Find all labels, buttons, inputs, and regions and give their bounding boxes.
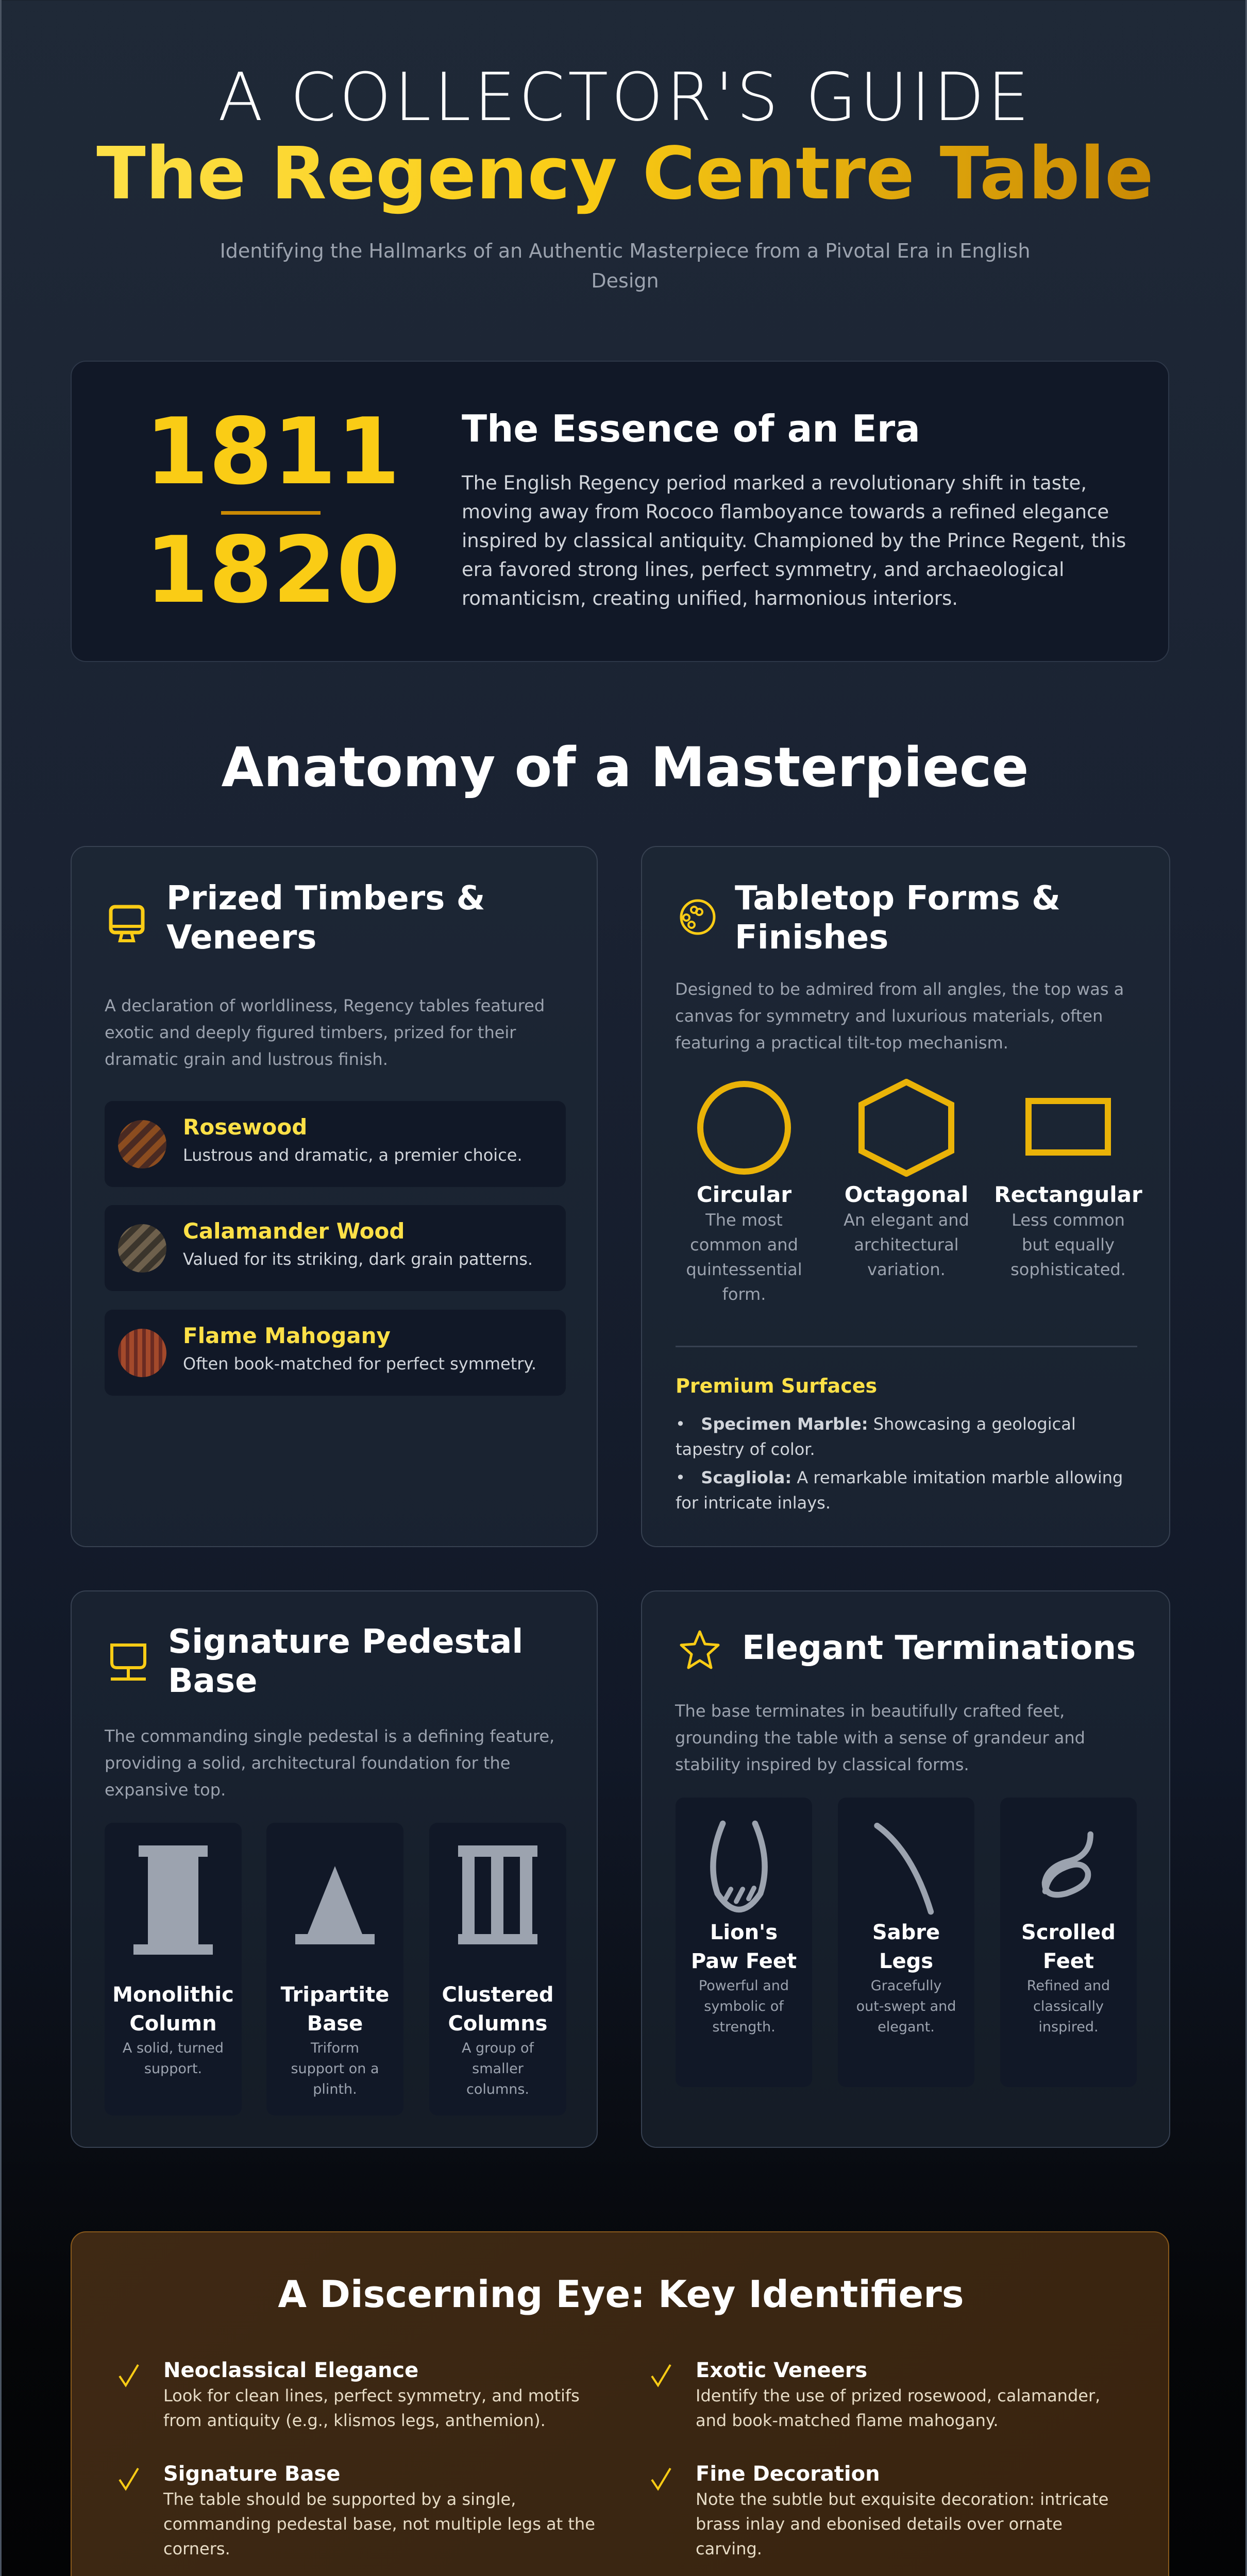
body text: The English Regency period marked a revolutionary shift in taste, moving away from Rococo flamboyance towards a refined elegance inspired by classical antiquity. Championed by the Prince Regent, this era favored strong lines, perfect symmetry, and archaeological romanticism, creating unified, harmonious interiors.: [462, 472, 1126, 609]
sub: sabre legs: Sabre Legs: [872, 1921, 940, 1973]
item: calamander: [105, 1205, 566, 1291]
premium surfaces: • Scagliola: A remarkable imitation marble allowing for intricate inlays.: [676, 1468, 1123, 1513]
panel: tabletop forms: [641, 846, 1170, 1547]
sub: clustered: A group of smaller columns.: [462, 2040, 534, 2097]
shape: rectangular: Rectangular: [994, 1182, 1142, 1207]
panel: essence of an era: [71, 361, 1169, 662]
identifier: neoclassical: Look for clean lines, perfect symmetry, and motifs from antiquity (e.g., klismos legs, anthemion).: [163, 2386, 580, 2430]
item: rosewood: [105, 1101, 566, 1187]
subtitle: Identifying the Hallmarks of an Authentic Masterpiece from a Pivotal Era in English Design: [220, 240, 1030, 292]
heading: A Discerning Eye: Key Identifiers: [278, 2273, 964, 2316]
identifier: signature base: Signature Base: [163, 2462, 340, 2486]
panel: essence of an era: 1820: [145, 517, 400, 623]
item: rosewood: Rosewood: [183, 1114, 307, 1140]
description: The base terminates in beautifully crafted feet, grounding the table with a sense of grandeur and stability inspired by classical forms.: [675, 1701, 1085, 1774]
item: flame mahogany: [105, 1310, 566, 1396]
item: flame mahogany: Flame Mahogany: [183, 1323, 391, 1348]
shape: rectangular: Less common but equally sophisticated.: [1010, 1210, 1126, 1279]
premium surfaces: Premium Surfaces: [676, 1375, 877, 1397]
panel: prized timbers: [71, 846, 598, 1547]
sub: monolithic: [105, 1823, 242, 2115]
identifier: neoclassical: Neoclassical Elegance: [163, 2359, 418, 2382]
icon: pedestal: [110, 1643, 146, 1681]
sub: lion's paw: Powerful and symbolic of strength.: [699, 1978, 789, 2035]
heading: Signature Pedestal Base: [168, 1623, 523, 1700]
sub: sabre legs: Gracefully out-swept and elegant.: [856, 1978, 956, 2035]
section heading: Anatomy of a Masterpiece: [221, 736, 1029, 799]
item: calamander: Calamander Wood: [183, 1218, 405, 1244]
heading: Elegant Terminations: [742, 1629, 1136, 1667]
panel: key identifiers: [71, 2231, 1169, 2576]
identifier: fine decoration: Note the subtle but exquisite decoration: intricate brass inlay and ebonised details over ornate carving.: [696, 2489, 1108, 2558]
dates: 1811: [145, 398, 400, 505]
sub: clustered: [429, 1823, 566, 2115]
sub: tripartite: Tripartite Base: [281, 1983, 389, 2036]
shape: octagonal: [844, 1079, 969, 1279]
icon: monitor: [109, 905, 144, 942]
main title: The Regency Centre Table: [96, 132, 1154, 216]
item: flame mahogany: Often book-matched for perfect symmetry.: [183, 1354, 536, 1374]
sub: tripartite: [266, 1823, 403, 2115]
identifier: exotic veneers: Exotic Veneers: [696, 2359, 867, 2382]
sub: monolithic: A solid, turned support.: [123, 2040, 224, 2077]
shape: circular: Circular: [697, 1182, 791, 1207]
identifier: fine decoration: [651, 2462, 1108, 2558]
identifier: signature base: The table should be supported by a single, commanding pedestal base, not multiple legs at the corners.: [163, 2489, 595, 2558]
sub: monolithic: Monolithic Column: [112, 1983, 234, 2036]
shape: circular: [686, 1081, 802, 1304]
item: rosewood: Lustrous and dramatic, a premier choice.: [183, 1145, 523, 1165]
sub: scrolled feet: [1000, 1798, 1137, 2087]
heading: Tabletop Forms & Finishes: [735, 879, 1060, 957]
description: The commanding single pedestal is a defining feature, providing a solid, architectural foundation for the expansive top.: [105, 1726, 554, 1800]
shape: circular: The most common and quintessential form.: [686, 1210, 802, 1304]
panel: elegant terminations: [641, 1590, 1170, 2148]
icon: globe: [680, 900, 715, 935]
sub: clustered: Clustered Columns: [442, 1983, 554, 2036]
sub: scrolled feet: Refined and classically inspired.: [1027, 1978, 1110, 2035]
description: A declaration of worldliness, Regency tables featured exotic and deeply figured timbers, prized for their dramatic grain and lustrous finish.: [105, 996, 545, 1069]
icon: star: [680, 1630, 719, 1669]
premium surfaces: [676, 1375, 1123, 1513]
description: Designed to be admired from all angles, the top was a canvas for symmetry and luxurious materials, often featuring a practical tilt-top mechanism.: [675, 979, 1124, 1053]
heading: Prized Timbers & Veneers: [166, 879, 485, 957]
sub: scrolled feet: Scrolled Feet: [1021, 1921, 1116, 1973]
header: subtitle kicker: A COLLECTOR'S GUIDE: [218, 59, 1032, 136]
shape: rectangular: [994, 1098, 1142, 1279]
premium surfaces: • Specimen Marble: Showcasing a geological tapestry of color.: [676, 1414, 1076, 1459]
identifier: exotic veneers: Identify the use of prized rosewood, calamander, and book-matched flame mahogany.: [696, 2386, 1100, 2430]
heading: The Essence of an Era: [462, 407, 920, 450]
shape: octagonal: Octagonal: [845, 1182, 968, 1207]
identifier: exotic veneers: [651, 2359, 1100, 2430]
item: calamander: Valued for its striking, dark grain patterns.: [183, 1249, 533, 1269]
identifier: signature base: [119, 2462, 595, 2558]
identifier: fine decoration: Fine Decoration: [696, 2462, 880, 2486]
panel: pedestal base: [71, 1590, 598, 2148]
sub: lion's paw: Lion's Paw Feet: [691, 1921, 797, 1973]
sub: tripartite: Triform support on a plinth.: [291, 2040, 379, 2097]
shape: octagonal: An elegant and architectural variation.: [844, 1210, 969, 1279]
shapes row: [686, 1079, 1142, 1304]
sub: sabre legs: [838, 1798, 974, 2087]
identifier: neoclassical: [119, 2359, 580, 2430]
sub: lion's paw: [676, 1798, 812, 2087]
